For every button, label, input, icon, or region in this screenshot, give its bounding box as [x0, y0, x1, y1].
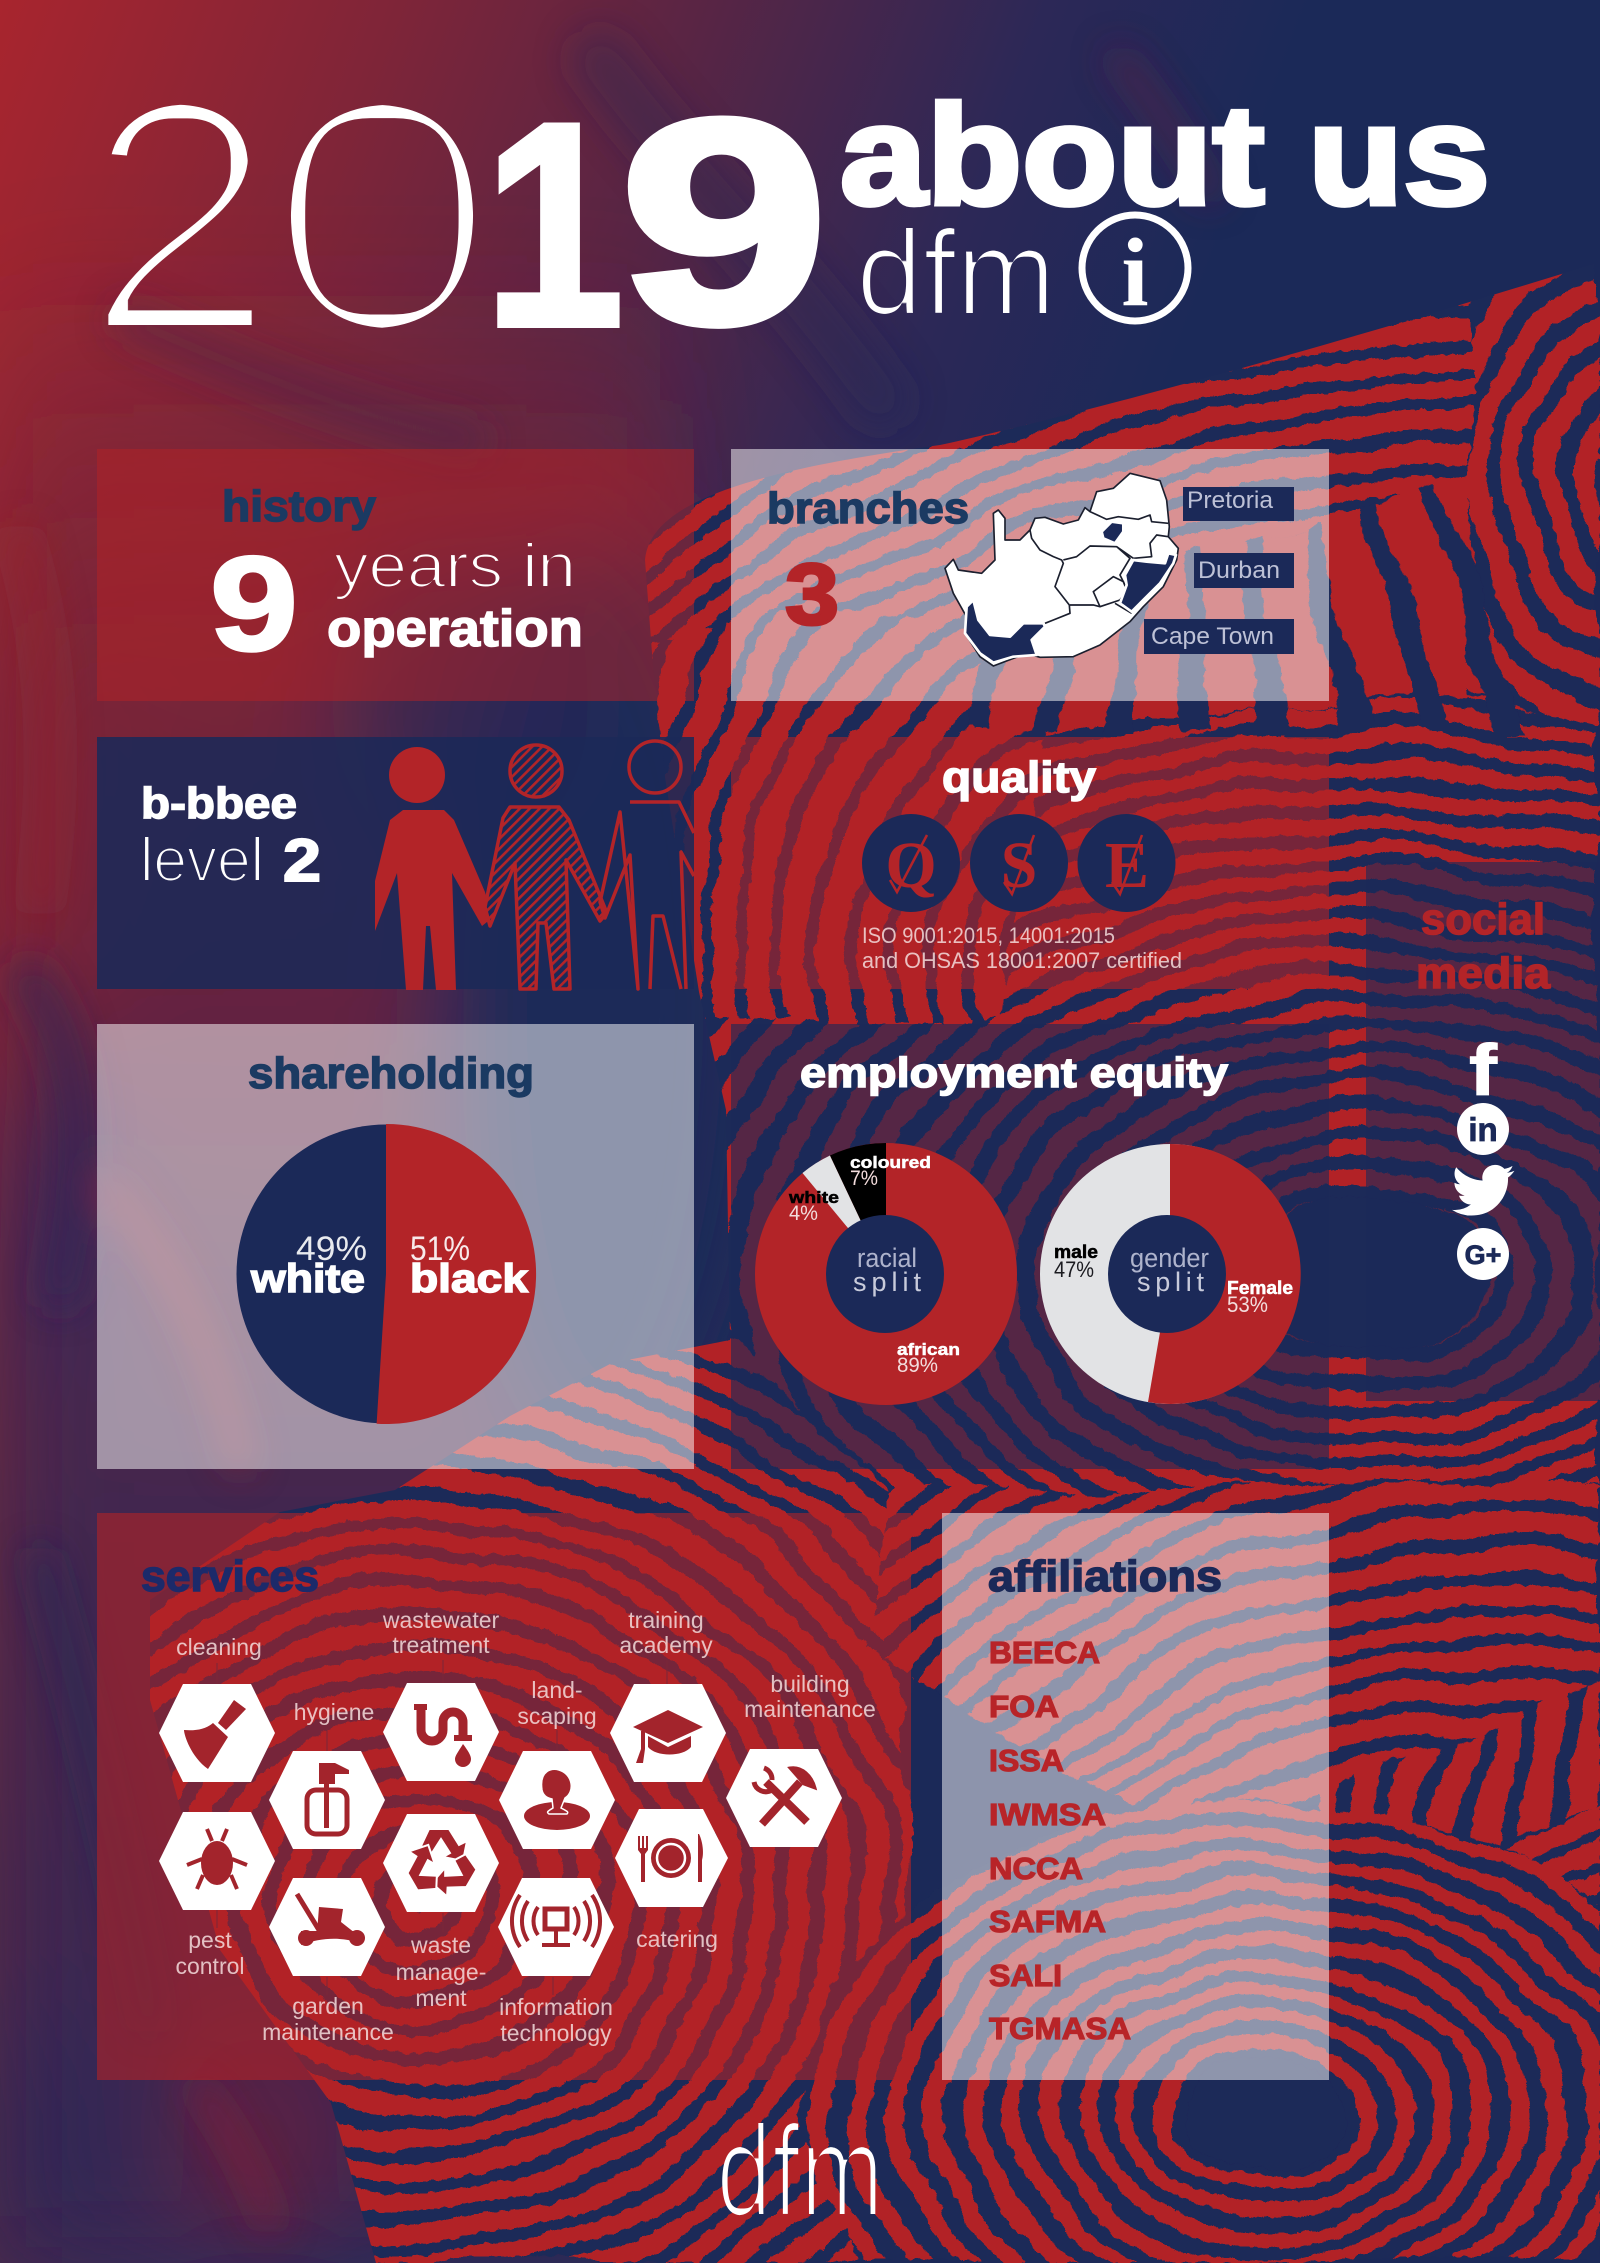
icon: linkedin: [1457, 1103, 1509, 1155]
badge: Q: [862, 814, 960, 912]
service: waste management: [383, 1814, 499, 2011]
service: waste management: ment: [415, 1985, 467, 2011]
footer logo: dfm: dfm: [716, 2100, 884, 2243]
list of affiliations: FOA: [989, 1689, 1059, 1724]
map of South Africa: [945, 473, 1178, 666]
donut chart: racial split: split: [853, 1267, 921, 1297]
donut chart: racial split: coloured: [850, 1153, 931, 1172]
service: catering: [615, 1809, 728, 1952]
panel: b-bbee: [97, 737, 694, 990]
list of affiliations: TGMASA: [989, 2011, 1131, 2046]
service: landscaping: scaping: [517, 1703, 597, 1729]
certification text: [862, 923, 1182, 973]
label: black share: black: [410, 1257, 529, 1301]
service: training academy: [610, 1607, 726, 1782]
service: garden maintenance: maintenance: [262, 2019, 394, 2045]
service: wastewater treatment: treatment: [392, 1632, 490, 1658]
icon: google plus: [1457, 1228, 1509, 1280]
donut chart: racial split: [755, 1143, 1017, 1405]
service: garden maintenance: [262, 1878, 394, 2045]
list of affiliations: NCCA: [989, 1851, 1083, 1886]
service: wastewater treatment: [382, 1607, 500, 1781]
panel: social media: [1366, 862, 1600, 1401]
heading: social media: media: [1416, 949, 1551, 998]
donut chart: racial split: african: [897, 1340, 960, 1359]
icon: linkedin: in: [1468, 1111, 1498, 1148]
service: information technology: information: [499, 1994, 613, 2020]
icon: info: i: [1121, 219, 1149, 327]
service: building maintenance: building: [770, 1671, 850, 1697]
background: fingerprint stripe pattern: [150, 273, 1600, 2263]
heading: affiliations: affiliations: [988, 1552, 1222, 1601]
service: building maintenance: maintenance: [744, 1696, 876, 1722]
level text: level: [140, 826, 264, 895]
label: white share: white: [250, 1257, 365, 1301]
donut chart: racial split: white: [788, 1188, 839, 1207]
number of branches: 3: [785, 547, 839, 643]
donut chart: gender split: Female: [1227, 1278, 1293, 1298]
heading: social media: [1416, 895, 1551, 998]
icon: google plus: G+: [1465, 1240, 1501, 1270]
heading: history: history: [222, 482, 377, 531]
service: hygiene: hygiene: [294, 1699, 374, 1725]
heading: branches: branches: [767, 484, 969, 533]
panel: branches: [731, 449, 1329, 701]
icon: info: [1082, 215, 1188, 327]
service: catering: catering: [636, 1926, 718, 1952]
big number 9: 9: [210, 530, 298, 679]
service: building maintenance: [726, 1671, 876, 1847]
panel: shareholding: [97, 1024, 694, 1469]
service: cleaning: [159, 1634, 275, 1782]
label: white share: [250, 1230, 367, 1301]
panel: quality: [731, 737, 1329, 989]
list of affiliations: SAFMA: [989, 1904, 1106, 1939]
donut chart: gender split: split: [1137, 1267, 1204, 1297]
service: information technology: [498, 1878, 614, 2046]
icon: three people holding hands: [375, 741, 694, 990]
years in: years in: [334, 532, 576, 601]
service: landscaping: [499, 1677, 615, 1849]
title: 2019: 2: [84, 31, 276, 400]
title: 2019: 0: [262, 31, 502, 400]
certification text: and OHSAS 18001:2007 certified: [862, 948, 1182, 973]
heading: employment equity: employment equity: [800, 1049, 1229, 1096]
panel: services: [97, 1513, 911, 2080]
title: 2019: 9: [620, 60, 828, 384]
label: Cape Town: Cape Town: [1151, 623, 1274, 650]
icon: facebook: f: [1469, 1031, 1498, 1111]
title: about us: about us: [840, 76, 1490, 235]
list of affiliations: [989, 1635, 1131, 2046]
pie chart: [236, 1124, 536, 1424]
level number: 2: [283, 827, 321, 894]
badge: S: S: [1001, 829, 1037, 902]
donut chart: gender split: male: [1054, 1242, 1098, 1262]
badge: Q: Q: [885, 829, 937, 902]
service: cleaning: cleaning: [176, 1634, 262, 1660]
panel: history: [97, 449, 694, 701]
service: training academy: training: [628, 1607, 704, 1633]
title: 2019: [84, 31, 828, 400]
service: pest control: pest: [188, 1927, 232, 1953]
donut chart: racial split: 7%: [850, 1167, 878, 1190]
heading: quality: quality: [942, 753, 1097, 802]
service: training academy: academy: [619, 1632, 713, 1658]
donut chart: racial split: 4%: [789, 1202, 818, 1225]
heading: b-bbee: b-bbee: [141, 779, 297, 828]
donut chart: gender split: [1040, 1144, 1301, 1404]
service: waste management: waste: [410, 1932, 471, 1958]
service: pest control: [159, 1812, 275, 1979]
service: wastewater treatment: wastewater: [382, 1607, 500, 1633]
donut chart: gender split: gender: [1130, 1243, 1209, 1273]
badge: S: [970, 814, 1068, 912]
list of affiliations: ISSA: [989, 1743, 1064, 1778]
badge: E: E: [1105, 829, 1149, 902]
badge: E: [1078, 814, 1176, 912]
label: Durban: Durban: [1198, 557, 1280, 584]
service: pest control: control: [175, 1953, 245, 1979]
label: Pretoria: Pretoria: [1187, 487, 1274, 514]
panel: affiliations: [942, 1513, 1329, 2080]
label: black share: [410, 1230, 529, 1301]
service: information technology: technology: [500, 2020, 612, 2046]
list of affiliations: IWMSA: [989, 1797, 1106, 1832]
heading: shareholding: shareholding: [248, 1049, 534, 1098]
service: waste management: manage-: [396, 1959, 486, 1985]
label: white share: 49%: [296, 1230, 367, 1268]
donut chart: racial split: 89%: [897, 1354, 938, 1377]
list of affiliations: BEECA: [989, 1635, 1100, 1670]
donut chart: gender split: 47%: [1054, 1257, 1094, 1282]
service: hygiene: [269, 1699, 385, 1849]
heading: services: services: [141, 1552, 319, 1601]
subtitle: dfm: dfm: [856, 206, 1056, 340]
label: Durban: [1194, 553, 1294, 588]
donut chart: racial split: racial: [857, 1243, 917, 1273]
label: Pretoria: [1183, 487, 1294, 521]
heading: social media: social: [1421, 895, 1545, 944]
operation: operation: [327, 600, 583, 658]
panel: employment equity: [731, 1024, 1329, 1469]
icon: twitter: [1452, 1165, 1514, 1216]
service: landscaping: land-: [531, 1677, 583, 1703]
title: 2019: 1: [484, 63, 624, 387]
list of affiliations: SALI: [989, 1958, 1062, 1993]
service: garden maintenance: garden: [292, 1993, 364, 2019]
certification text: ISO 9001:2015, 14001:2015: [862, 923, 1115, 948]
label: black share: 51%: [410, 1230, 470, 1268]
donut chart: gender split: 53%: [1227, 1292, 1268, 1317]
label: Cape Town: [1144, 619, 1294, 654]
